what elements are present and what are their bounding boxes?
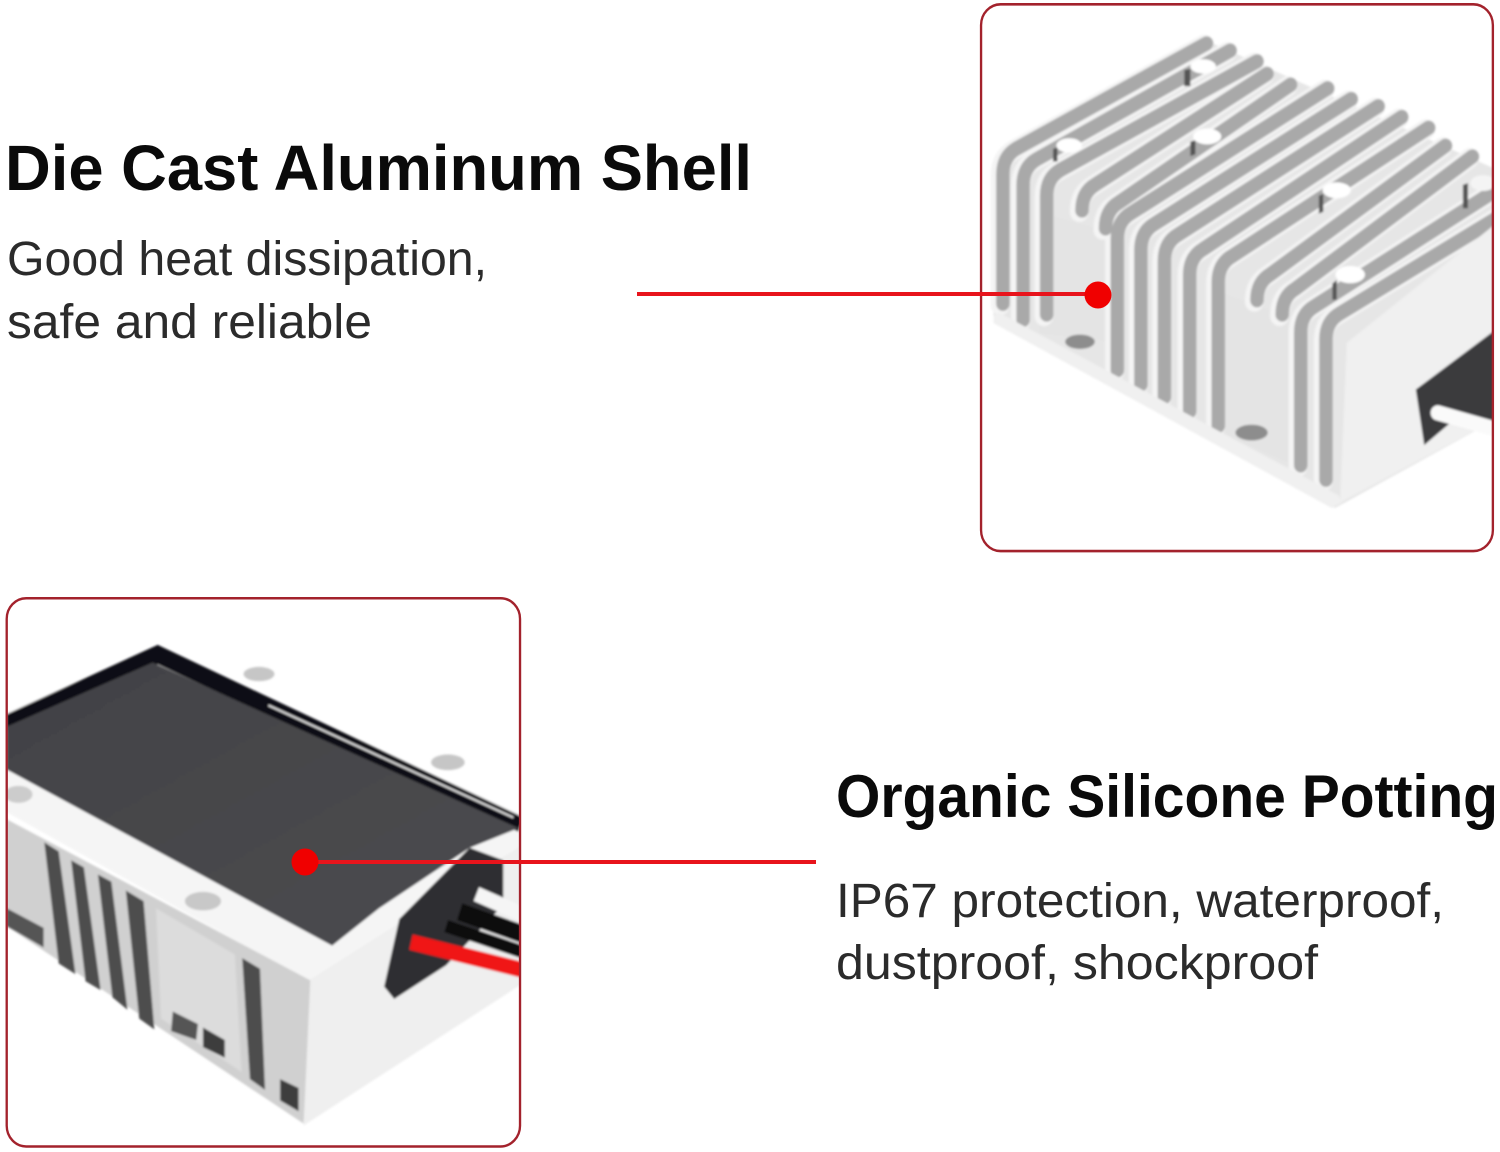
callout: potting pointer: [292, 848, 816, 876]
white top surface: [7, 647, 523, 983]
text block: potting description: IP67 protection, waterproof,: [836, 875, 1444, 928]
mounting holes: [4, 667, 465, 910]
heading: die cast aluminum shell: Die Cast Aluminum Shell: [5, 132, 752, 204]
text block: potting description: dustproof, shockproof: [836, 937, 1319, 990]
mounting holes: [1053, 59, 1496, 440]
black potting rim: [7, 645, 523, 832]
panel border: [981, 4, 1493, 551]
cable connector and wires: [384, 848, 525, 999]
text block: shell description: [7, 233, 487, 349]
text block: potting description: [836, 875, 1444, 990]
end face: [1340, 224, 1495, 503]
rim highlight: [268, 705, 513, 818]
panel: die cast aluminum shell photo: [981, 4, 1498, 551]
callout: shell pointer: [637, 282, 1112, 308]
cable connector: [1416, 330, 1495, 445]
base plate: [994, 312, 1342, 508]
end face: [304, 844, 523, 1125]
potting surface: [7, 663, 518, 946]
text block: shell description: safe and reliable: [7, 296, 372, 349]
text block: shell description: Good heat dissipation,: [7, 233, 487, 286]
heat sink body: [992, 39, 1495, 508]
cooling fins: [1000, 43, 1498, 481]
finned side wall: [7, 819, 312, 1124]
panel border: [7, 598, 520, 1146]
panel: organic silicone potting photo: [4, 598, 525, 1146]
